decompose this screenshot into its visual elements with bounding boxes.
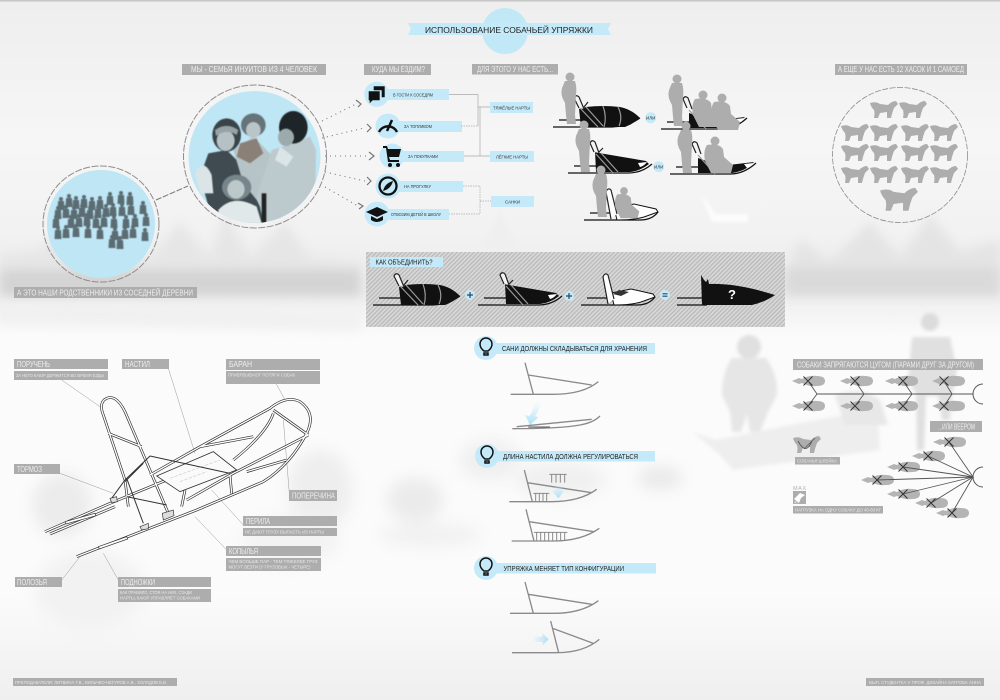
label: crossbar: ПОПЕРЕЧИНА bbox=[292, 492, 336, 500]
label: load per dog bbox=[793, 506, 883, 514]
heading: dogs: А ЕЩЕ У НАС ЕСТЬ 12 ХАСОК И 1 САМОЕД bbox=[838, 65, 964, 74]
requirement 2 heading: ДЛИНА НАСТИЛА ДОЛЖНА РЕГУЛИРОВАТЬСЯ bbox=[503, 452, 638, 461]
dotted arrows to destinations bbox=[322, 100, 374, 209]
label: footboards bbox=[118, 577, 211, 602]
title ribbon: ИСПОЛЬЗОВАНИЕ СОБАЧЬЕЙ УПРЯЖКИ bbox=[425, 24, 593, 35]
destination: school bbox=[364, 202, 449, 226]
footer: student: ВЫП. СТУДЕНТКА V ПРОФ. ДИЗАЙНА КАТРОВА АННА bbox=[869, 678, 981, 685]
label: rails bbox=[243, 516, 337, 536]
destination: school: ОТВОЗИМ ДЕТЕЙ В ШКОЛУ bbox=[391, 210, 441, 217]
family photo circle bbox=[184, 85, 326, 228]
label: small sledge: САНКИ bbox=[505, 200, 520, 204]
icon: or 1: ИЛИ bbox=[646, 115, 655, 120]
fold diagrams 1 bbox=[511, 363, 600, 429]
heading: dogs bbox=[835, 64, 967, 75]
icon: equals bbox=[660, 290, 670, 300]
destination: fuel: ЗА ТОПЛИВОМ bbox=[404, 124, 432, 129]
title ribbon bbox=[408, 8, 611, 54]
label: dog harness: СОБАЧЬЯ ШЛЕЙКА bbox=[797, 456, 837, 464]
label: how to combine bbox=[370, 257, 443, 267]
tandem hitch diagram bbox=[792, 376, 983, 411]
pictogram: light sled with driver bbox=[568, 120, 652, 173]
label: footboards: НАРТЫ, КАЮР УПРАВЛЯЕТ СОБАКАМИ bbox=[120, 596, 200, 600]
icon: or 2 bbox=[653, 161, 664, 172]
harness diagrams bbox=[510, 582, 599, 653]
label: footboards: КАК ПРАВИЛО, СТОЯ НА НИХ, СЗАДИ bbox=[120, 590, 192, 595]
destination: visit neighbours bbox=[364, 82, 449, 107]
heading: fan hitch: ...ИЛИ ВЕЕРОМ bbox=[938, 422, 975, 432]
label: handlebar: ЗА НЕГО КАЮР ДЕРЖИТСЯ ВО ВРЕМЯ ЕЗДЫ bbox=[16, 373, 104, 378]
destination: visit neighbours: В ГОСТИ К СОСЕДЯМ bbox=[393, 92, 433, 97]
destination: walk bbox=[376, 174, 463, 198]
pictogram: heavy sled with passengers bbox=[661, 74, 747, 130]
label: light sled: ЛЁГКИЕ НАРТЫ bbox=[496, 154, 528, 160]
destination: shopping bbox=[380, 144, 464, 168]
label: stanchions: МОГУТ ВЕЗТИ (У ГРУЗОВЫХ - ЧЕТЫРЕ) bbox=[228, 564, 311, 570]
relatives photo circle bbox=[43, 166, 159, 282]
label: stanchions: ЧЕМ БОЛЬШЕ ПАР - ТЕМ ТЯЖЕЛЕЕ ГРУЗ bbox=[228, 559, 318, 564]
footer: teachers bbox=[13, 678, 177, 686]
requirement 2 heading bbox=[475, 444, 655, 468]
heading: what we have bbox=[472, 64, 558, 74]
link between circles bbox=[156, 186, 188, 200]
destination: fuel bbox=[376, 114, 462, 138]
arrow: deck insertion bbox=[552, 484, 564, 498]
destination: walk: НА ПРОГУЛКУ bbox=[404, 184, 431, 189]
label: brush bow: ПРИВЯЗЫВАЮТ ПОТЯГИ СОБАК bbox=[228, 372, 295, 378]
label: brush bow bbox=[226, 359, 320, 384]
heading: fan hitch bbox=[930, 421, 982, 432]
label: how to combine: КАК ОБЪЕДИНИТЬ? bbox=[376, 260, 433, 266]
label: brake: ТОРМОЗ bbox=[17, 465, 42, 474]
pictogram: small sledge with child bbox=[584, 166, 658, 220]
label: brake bbox=[14, 464, 60, 474]
heading: relatives: А ЭТО НАШИ РОДСТВЕННИКИ ИЗ СОСЕДНЕЙ ДЕРЕВНИ bbox=[17, 288, 193, 298]
icon: or 2: ИЛИ bbox=[654, 164, 663, 169]
label: rails: ПЕРИЛА bbox=[246, 517, 270, 526]
heading: where we go: КУДА МЫ ЕЗДИМ? bbox=[372, 65, 425, 74]
icon: cart bbox=[383, 146, 401, 167]
label: handlebar bbox=[14, 359, 108, 380]
panel: how to combine bbox=[366, 252, 785, 327]
dogs circle bbox=[832, 88, 968, 222]
requirement 3 heading: УПРЯЖКА МЕНЯЕТ ТИП КОНФИГУРАЦИИ bbox=[504, 564, 624, 573]
heading: family: МЫ - СЕМЬЯ ИНУИТОВ ИЗ 4 ЧЕЛОВЕК bbox=[191, 65, 317, 74]
label: runners: ПОЛОЗЬЯ bbox=[17, 578, 47, 587]
label: light sled bbox=[490, 151, 534, 162]
icon: light bulb bbox=[480, 338, 492, 355]
icon: max load: MAX bbox=[793, 486, 806, 492]
requirement 1 heading: САНИ ДОЛЖНЫ СКЛАДЫВАТЬСЯ ДЛЯ ХРАНЕНИЯ bbox=[502, 344, 647, 353]
label: load per dog: НАГРУЗКА НА ОДНУ СОБАКУ ДО 40-60 КГ bbox=[795, 508, 882, 512]
heading: where we go bbox=[364, 64, 431, 75]
label: stanchions bbox=[226, 546, 321, 571]
footer: teachers: ПРЕПОДАВАТЕЛИ: ЛИТВИНА Т.В., ВИЛЬЧКО-НЕГУРОВ А.В., ХОЛОДОВ Б.В. bbox=[15, 680, 167, 685]
label: brush bow: БАРАН bbox=[229, 360, 252, 369]
sled: unknown result bbox=[677, 275, 775, 305]
connectors to sled types bbox=[449, 94, 491, 214]
icon: plus 2 bbox=[564, 291, 574, 301]
arrow: configuration change bbox=[532, 633, 549, 645]
label: crossbar bbox=[289, 490, 337, 501]
heading: what we have: ДЛЯ ЭТОГО У НАС ЕСТЬ... bbox=[477, 65, 553, 74]
arrow: fold down bbox=[525, 402, 541, 425]
label: deck: НАСТИЛ bbox=[125, 360, 150, 369]
icon: max load: 40 bbox=[794, 500, 799, 504]
destination: shopping: ЗА ПОКУПКАМИ bbox=[408, 154, 438, 159]
label: handlebar: ПОРУЧЕНЬ bbox=[17, 360, 50, 369]
pictogram: heavy sled with driver bbox=[553, 72, 640, 127]
icon: speech bubbles bbox=[369, 86, 385, 103]
icon: graduation cap bbox=[366, 207, 388, 222]
sled diagram bbox=[45, 368, 310, 580]
label: small sledge bbox=[491, 196, 534, 207]
requirement 3 heading bbox=[474, 556, 656, 580]
label: heavy sled bbox=[490, 102, 533, 113]
label: rails: НЕ ДАЮТ ГРУЗУ ВЫПАСТЬ ИЗ НАРТЫ bbox=[245, 530, 324, 534]
icon: compass bbox=[380, 178, 396, 194]
icon: max load bbox=[793, 486, 806, 504]
icon: or 1 bbox=[645, 112, 656, 123]
icon: plus bbox=[465, 290, 475, 300]
sled: heavy bbox=[373, 274, 460, 305]
label: heavy sled: ТЯЖЁЛЫЕ НАРТЫ bbox=[493, 104, 530, 110]
fan hitch diagram bbox=[861, 437, 983, 518]
icon: light bulb bbox=[480, 558, 492, 575]
sled: unknown result: ? bbox=[728, 287, 736, 302]
icon: light bulb bbox=[481, 446, 493, 463]
sled: small bbox=[581, 274, 655, 305]
deck length diagrams bbox=[509, 470, 599, 541]
label: deck bbox=[122, 359, 169, 369]
icon: dog harness bbox=[793, 436, 821, 453]
label: footboards: ПОДНОЖКИ bbox=[121, 578, 155, 587]
label: stanchions: КОПЫЛЬЯ bbox=[229, 547, 258, 556]
pictogram: light sled with passenger bbox=[670, 122, 756, 174]
icon: gauge bbox=[379, 120, 397, 132]
footer: student bbox=[866, 678, 984, 686]
heading: relatives bbox=[14, 287, 197, 298]
label: dog harness bbox=[795, 456, 840, 464]
requirement 1 heading bbox=[474, 336, 655, 360]
sled: light bbox=[478, 273, 562, 305]
